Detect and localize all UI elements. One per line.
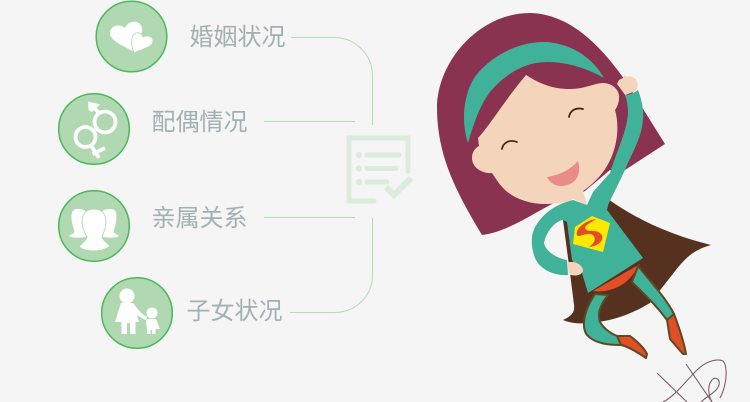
row: marital status: [96, 1, 286, 72]
headband: [464, 42, 604, 143]
raised hand: [617, 75, 638, 95]
eyes: [502, 108, 583, 149]
left hand: [568, 262, 583, 276]
shorts: [593, 264, 640, 291]
face: [472, 75, 619, 205]
icon: checklist document: [349, 138, 411, 201]
row: spouse: [59, 94, 248, 164]
icon: gender symbols: [59, 94, 129, 164]
left leg: [584, 294, 647, 358]
label: children: 子女状况: [186, 298, 282, 325]
label: spouse: 配偶情况: [152, 109, 248, 136]
label: marital status: 婚姻状况: [190, 24, 286, 51]
right leg: [632, 266, 686, 354]
label: relatives: 亲属关系: [152, 205, 248, 232]
row: relatives: [59, 191, 248, 261]
chest shield: [573, 216, 610, 252]
hair: [437, 13, 665, 235]
letter S: [577, 219, 602, 247]
body and arms: [532, 90, 643, 293]
row: children: [102, 278, 282, 348]
cape: [563, 199, 711, 323]
signature flourish: [657, 360, 726, 402]
icon: hearts: [96, 1, 167, 72]
mouth: [547, 161, 579, 186]
icon: three silhouettes: [59, 191, 129, 261]
icon: parent and child: [102, 278, 172, 348]
illustration: flying superhero girl: [437, 13, 726, 402]
